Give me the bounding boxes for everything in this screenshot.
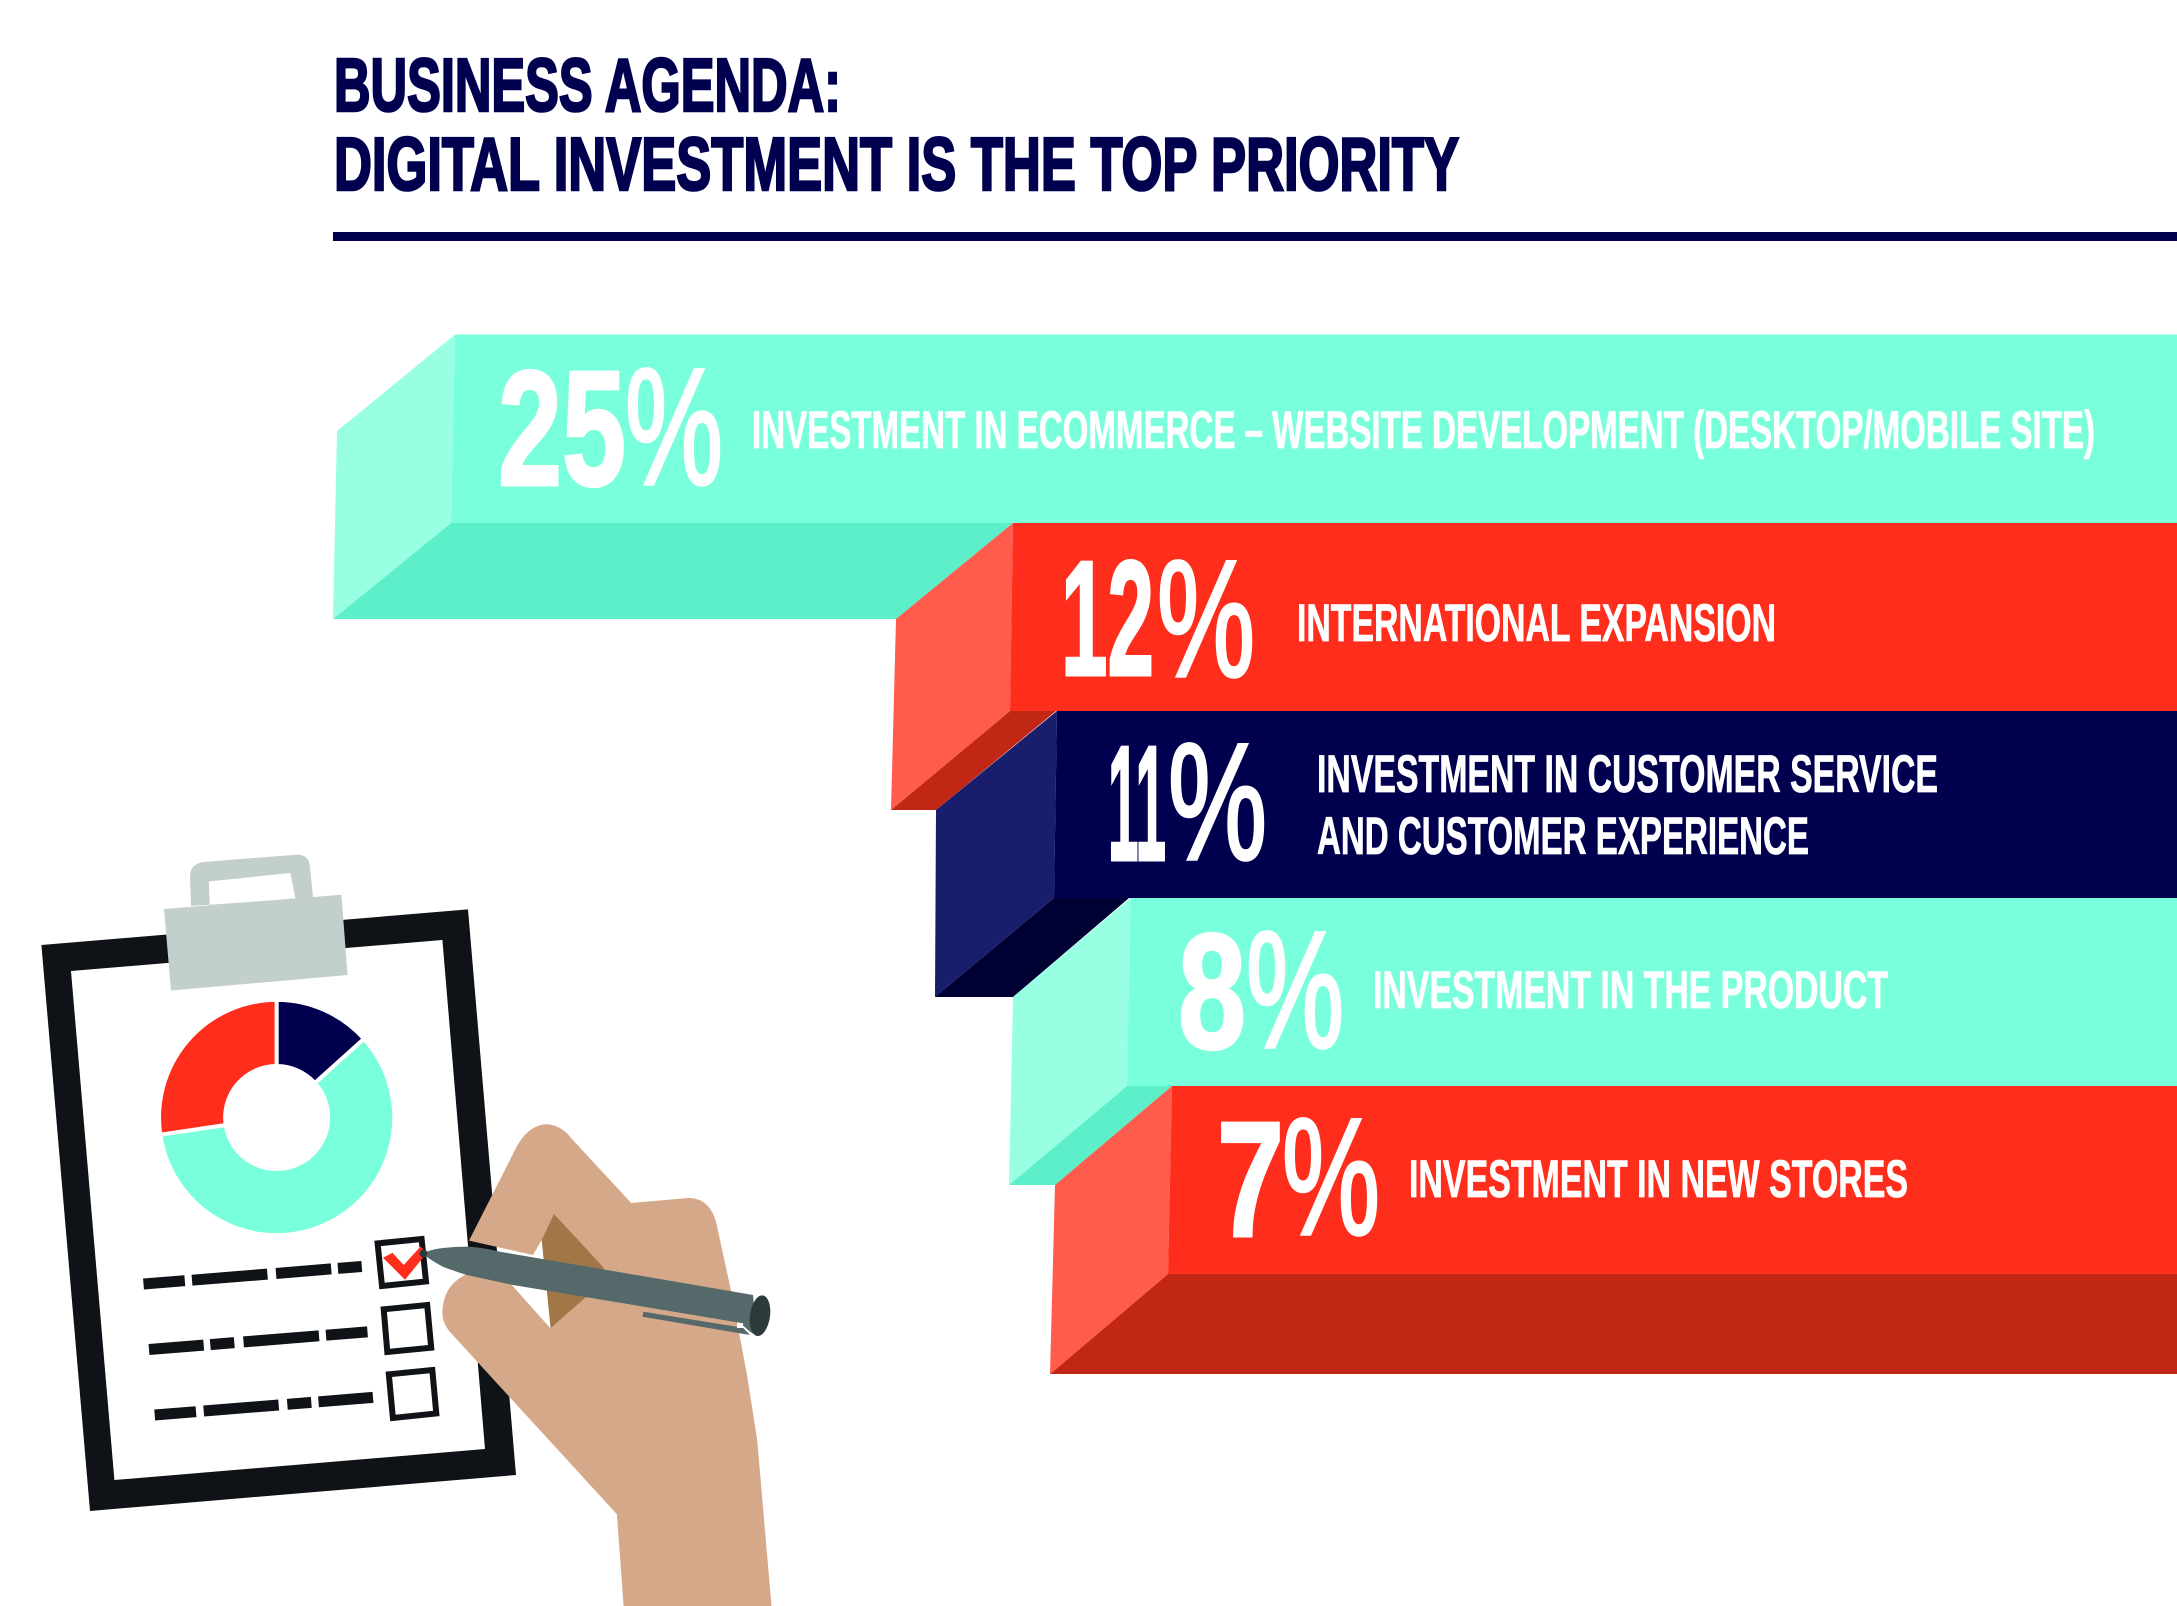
red check mark [383, 1246, 427, 1280]
pen tip [420, 1250, 428, 1258]
title rule [333, 232, 2177, 241]
pen [420, 1247, 773, 1337]
clipboard board [41, 909, 516, 1511]
title: BUSINESS AGENDA: [334, 43, 841, 127]
band: 8% product: 8 [1178, 900, 1246, 1083]
pen clip [643, 1312, 750, 1335]
band: 11% customer service and experience: 11 [1108, 712, 1166, 895]
icon: hand holding pen [420, 1124, 773, 1606]
band: 7% new stores: 7 [1217, 1088, 1284, 1271]
pen body [427, 1247, 757, 1336]
band: 7% new stores: INVESTMENT IN NEW STORES [1409, 1150, 1908, 1209]
band: 7% new stores [1050, 1085, 2177, 1374]
pen end cap [747, 1294, 773, 1337]
band: 12% international expansion [891, 523, 2177, 810]
clipboard clip [164, 855, 348, 990]
band: 8% product [1009, 898, 2177, 1185]
band: 11% customer service and experience: % [1168, 710, 1267, 895]
band: 25% ecommerce: % [625, 335, 723, 520]
band: 12% international expansion: % [1157, 527, 1255, 712]
band: 11% customer service and experience: AND CUSTOMER EXPERIENCE [1317, 807, 1809, 866]
band: 12% international expansion: 12 [1061, 527, 1154, 710]
band: 11% customer service and experience [935, 710, 2177, 997]
checkboxes [378, 1239, 436, 1418]
donut chart [159, 1000, 394, 1235]
band: 12% international expansion: INTERNATIONAL EXPANSION [1297, 594, 1776, 653]
band: 25% ecommerce [333, 334, 2177, 619]
checklist lines [144, 1266, 373, 1415]
hand [442, 1124, 772, 1606]
title [334, 43, 1459, 206]
clipboard paper [71, 940, 485, 1480]
band: 7% new stores: % [1282, 1085, 1380, 1270]
shadow between fingers [542, 1214, 604, 1328]
band: 8% product: INVESTMENT IN THE PRODUCT [1373, 961, 1888, 1020]
title: DIGITAL INVESTMENT IS THE TOP PRIORITY [334, 122, 1459, 206]
band: 25% ecommerce: 25 [498, 337, 626, 520]
band: 8% product: % [1246, 898, 1344, 1083]
icon: clipboard with checklist [41, 855, 516, 1511]
